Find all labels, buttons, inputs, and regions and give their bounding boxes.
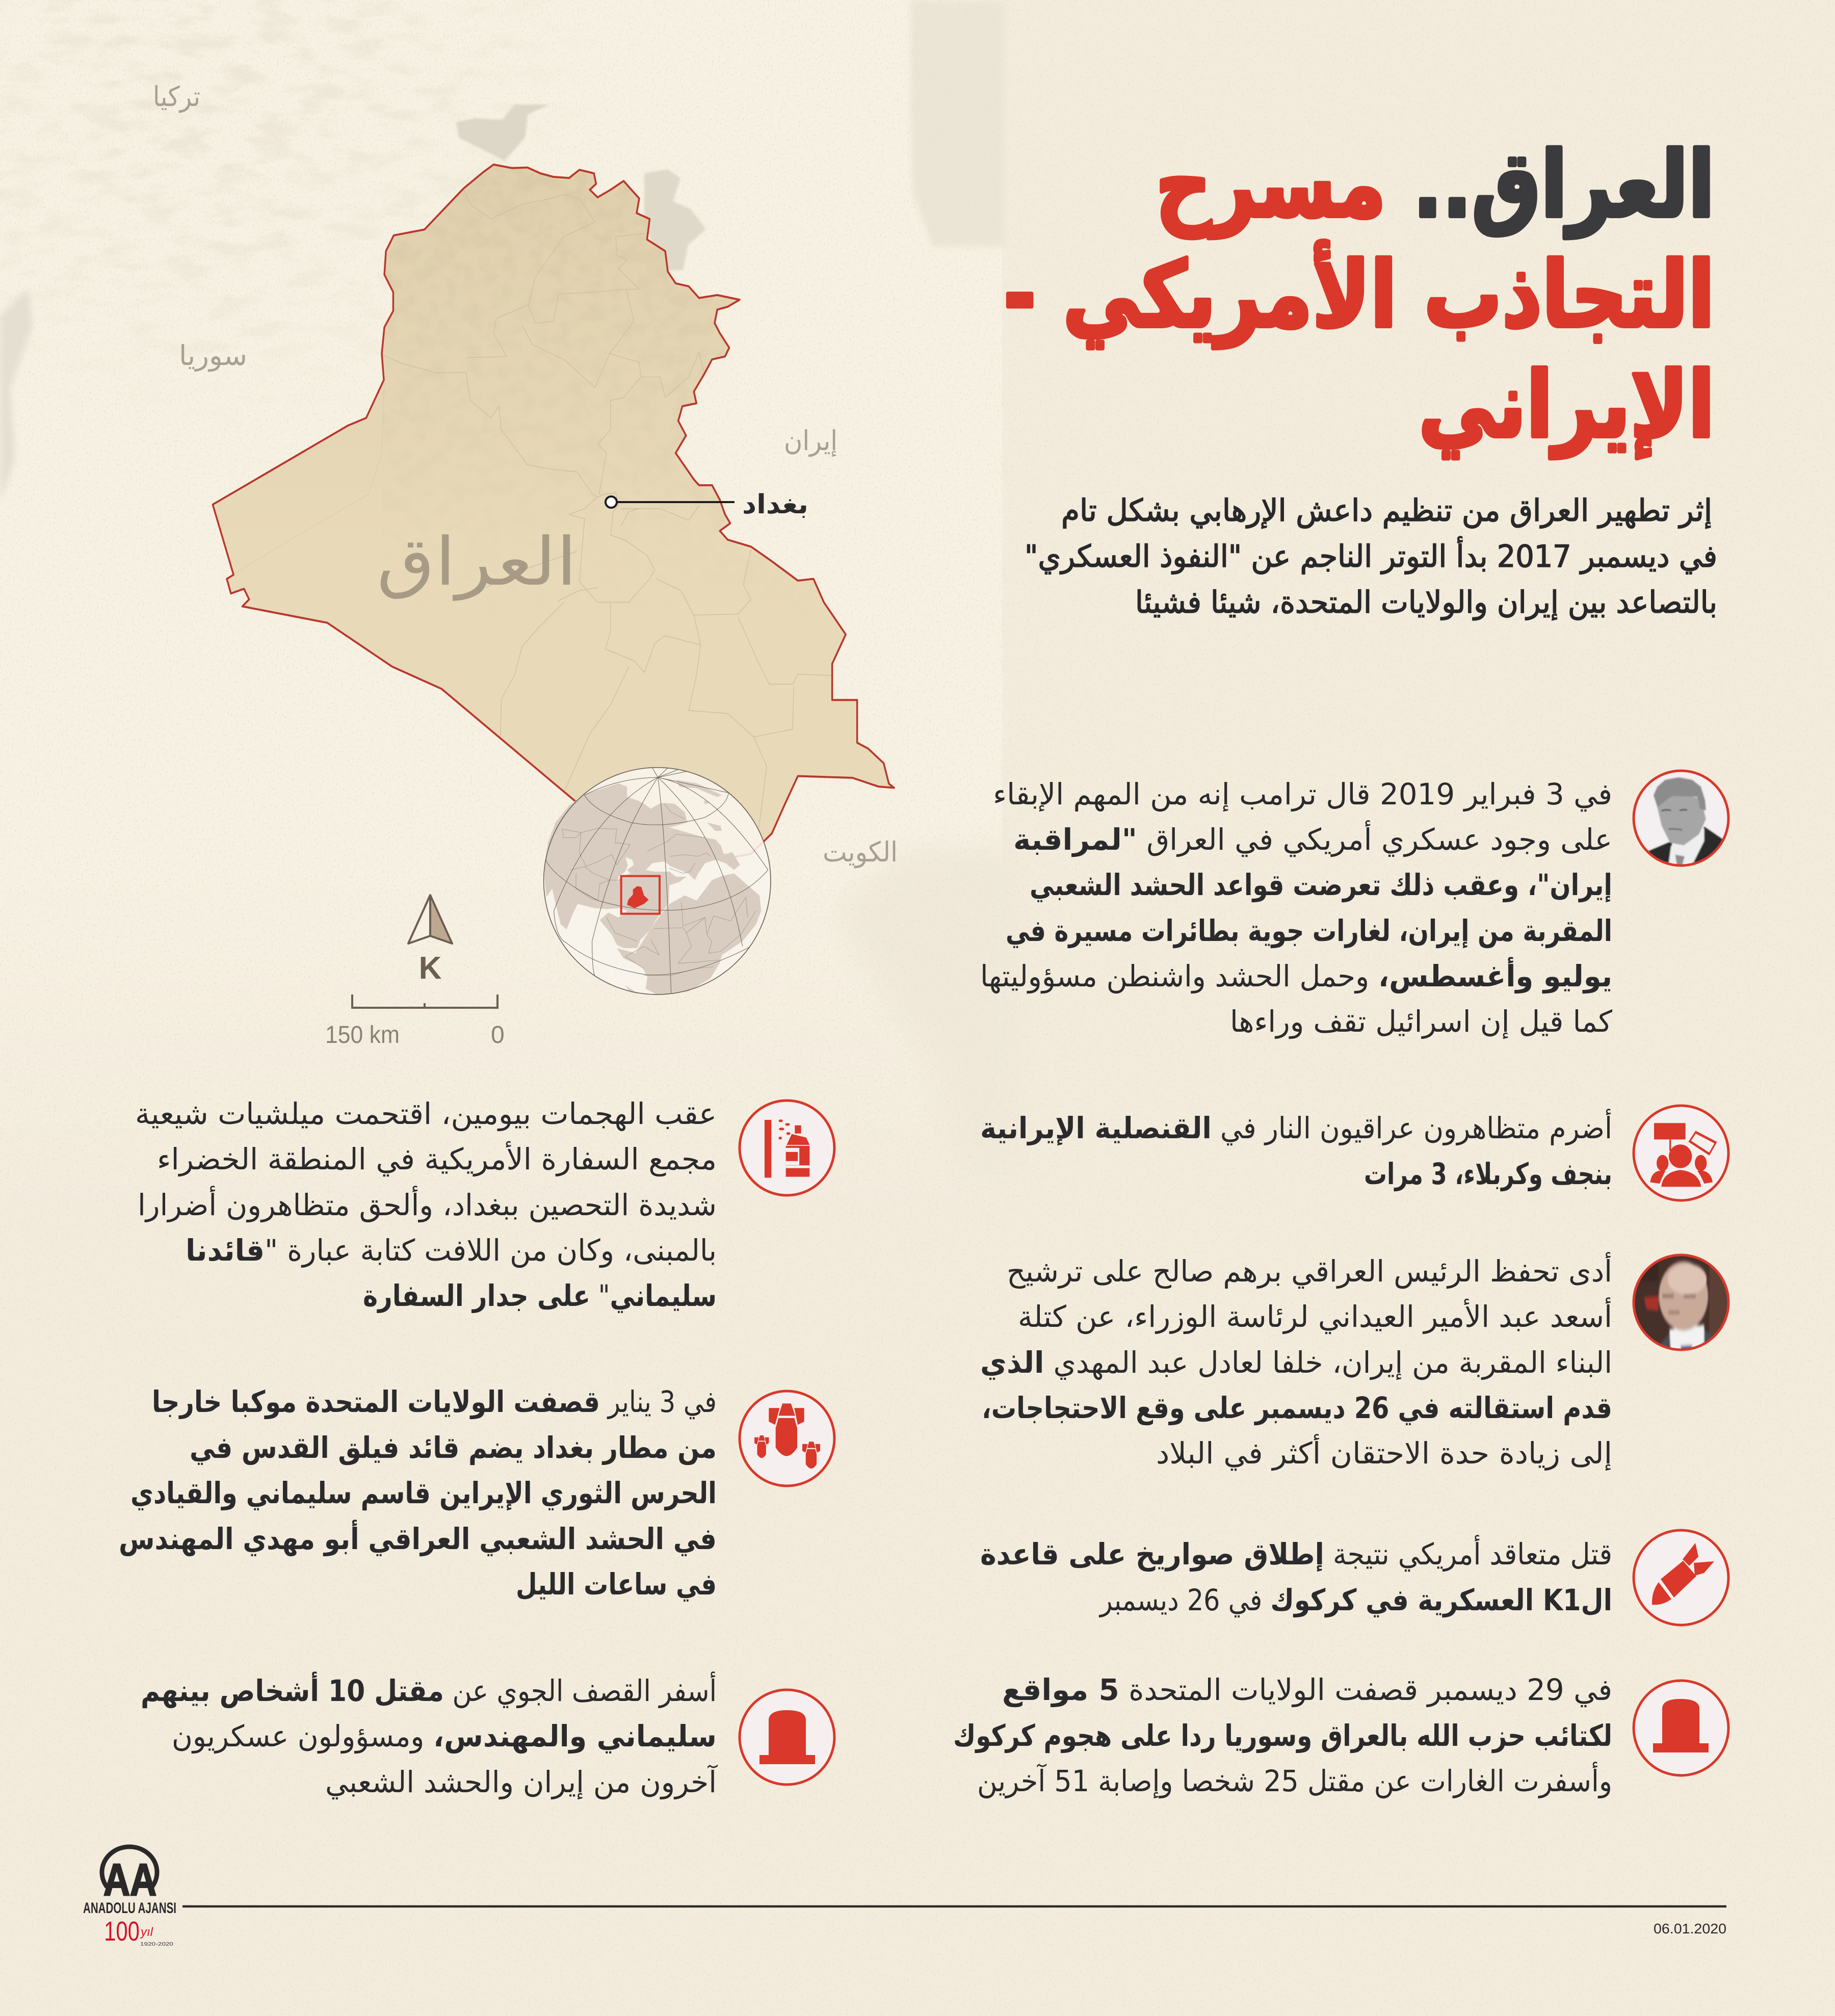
- marker: baghdad: [606, 489, 808, 520]
- text: trump: في 3 فبراير 2019 قال ترامب إنه من المهم الإبقاء: [993, 777, 1612, 812]
- text: barham salih: إلى زيادة حدة الاحتقان أكثر في البلاد: [1156, 1434, 1612, 1471]
- intro paragraph: إثر تطهير العراق من تنظيم داعش الإرهابي بشكل تام: [1061, 493, 1712, 529]
- anadolu agency logo: [83, 1847, 176, 1947]
- scale bar: 150 km: [325, 1022, 400, 1049]
- item: protest: [980, 1106, 1728, 1200]
- text: embassy: شديدة التحصين ببغداد، وألحق متظاهرون أضرارا: [138, 1186, 717, 1223]
- text: casualties: [141, 1671, 718, 1800]
- anadolu agency logo: AA: [103, 1854, 156, 1905]
- portrait: trump: [1634, 771, 1728, 867]
- title: الإيراني: [1419, 352, 1715, 459]
- globe borders: [562, 804, 756, 975]
- text: protest: [980, 1109, 1612, 1192]
- label: syria: سوريا: [179, 339, 247, 372]
- lake urmia: [644, 169, 706, 270]
- anadolu agency logo: ANADOLU AJANSI: [83, 1900, 176, 1917]
- item: barham salih: [980, 1252, 1729, 1471]
- text: trump: يوليو وأغسطس، وحمل الحشد واشنطن مسؤوليتها: [980, 957, 1612, 994]
- text: embassy: عقب الهجمات بيومين، اقتحمت ميلشيات شيعية: [135, 1096, 717, 1132]
- text: convoy strike: في 3 يناير قصفت الولايات المتحدة موكبا خارجا: [152, 1384, 717, 1420]
- item: trump: [980, 771, 1728, 1039]
- text: protest: أضرم متظاهرون عراقيون النار في القنصلية الإيرانية: [980, 1109, 1612, 1146]
- scale bar: 0: [491, 1022, 505, 1049]
- text: trump: على وجود عسكري أمريكي في العراق "لمراقبة: [1013, 820, 1612, 857]
- label: iraq: العراق: [377, 523, 577, 601]
- text: rocket attack: [980, 1535, 1612, 1618]
- footer rule: [182, 1905, 1726, 1907]
- icon: protesters: [1634, 1106, 1728, 1200]
- text: convoy strike: [119, 1384, 717, 1602]
- text: barham salih: أسعد عبد الأمير العيداني لرئاسة الوزراء، عن كتلة: [1018, 1297, 1612, 1334]
- map of iraq: [153, 81, 898, 868]
- text: us strikes: [953, 1672, 1612, 1799]
- date: 06.01.2020: [1654, 1921, 1726, 1936]
- text: convoy strike: في الحشد الشعبي العراقي أبو مهدي المهندس: [119, 1520, 717, 1557]
- iraq on globe: [627, 886, 649, 908]
- icon: alarm: [1634, 1681, 1728, 1775]
- item: casualties: [141, 1671, 834, 1800]
- text: barham salih: أدى تحفظ الرئيس العراقي برهم صالح على ترشيح: [1007, 1252, 1612, 1289]
- globe land masses: [544, 780, 761, 995]
- label: iran: إيران: [784, 425, 837, 457]
- icon: missile: [1634, 1530, 1728, 1625]
- anadolu agency logo: yıl: [140, 1925, 153, 1939]
- text: rocket attack: الK1 العسكرية في كركوك في 26 ديسمبر: [1098, 1583, 1612, 1618]
- text: trump: المقربة من إيران، لغارات جوية بطائرات مسيرة في: [1006, 913, 1612, 949]
- anadolu agency logo: 100: [104, 1916, 140, 1947]
- item: us strikes: [953, 1672, 1728, 1799]
- item: convoy strike: [119, 1384, 834, 1602]
- portrait: barham salih: [1633, 1254, 1729, 1354]
- left column items: [119, 1096, 834, 1800]
- text: barham salih: البناء المقربة من إيران، خلفا لعادل عبد المهدي الذي: [980, 1345, 1612, 1380]
- text: casualties: سليماني والمهندس، ومسؤولون عسكريون: [172, 1719, 717, 1754]
- iraq territory: [213, 161, 894, 857]
- text: casualties: آخرون من إيران والحشد الشعبي: [325, 1764, 718, 1800]
- globe grid: [545, 768, 768, 994]
- intro paragraph: في ديسمبر 2017 بدأ التوتر الناجم عن "النفوذ العسكري": [1025, 536, 1717, 574]
- label: turkey: تركيا: [153, 81, 200, 113]
- item: embassy: [135, 1096, 834, 1313]
- text: us strikes: لكتائب حزب الله بالعراق وسوريا ردا على هجوم كركوك: [953, 1718, 1612, 1753]
- north arrow: [408, 895, 452, 986]
- text: protest: بنجف وكربلاء، 3 مرات: [1364, 1157, 1612, 1192]
- text: convoy strike: من مطار بغداد يضم قائد فيلق القدس في: [190, 1430, 717, 1465]
- text: trump: [980, 777, 1612, 1039]
- north arrow: K: [419, 951, 442, 986]
- text: trump: إيران"، وعقب ذلك تعرضت قواعد الحشد الشعبي: [1030, 868, 1612, 903]
- icon: spray paint: [740, 1101, 834, 1195]
- icon: alarm: [740, 1690, 834, 1785]
- title: العراق.. مسرح: [1156, 132, 1715, 239]
- intro paragraph: [1025, 493, 1717, 620]
- text: us strikes: وأسفرت الغارات عن مقتل 25 شخصا وإصابة 51 آخرين: [977, 1762, 1612, 1799]
- title: التجاذب الأمريكي -: [1004, 241, 1715, 349]
- text: rocket attack: قتل متعاقد أمريكي نتيجة إطلاق صواريخ على قاعدة: [980, 1535, 1612, 1572]
- anadolu agency logo: 1920-2020: [140, 1942, 174, 1947]
- footer: [83, 1847, 1726, 1947]
- text: convoy strike: الحرس الثوري الإيراين قاسم سليماني والقيادي: [130, 1476, 717, 1511]
- icon: bombs: [740, 1391, 834, 1486]
- item: rocket attack: [980, 1530, 1728, 1625]
- text: barham salih: [980, 1252, 1612, 1471]
- text: convoy strike: في ساعات الليل: [516, 1567, 717, 1602]
- title: [1004, 132, 1715, 459]
- text: casualties: أسفر القصف الجوي عن مقتل 10 أشخاص بينهم: [141, 1671, 717, 1709]
- text: embassy: بالمبنى، وكان من اللافت كتابة عبارة "قائدنا: [186, 1233, 717, 1268]
- right column items: [953, 771, 1729, 1799]
- text: trump: كما قيل إن اسرائيل تقف وراءها: [1230, 1004, 1612, 1039]
- marker: baghdad: بغداد: [742, 489, 808, 520]
- lake van: [456, 104, 549, 161]
- intro paragraph: بالتصاعد بين إيران والولايات المتحدة، شيئا فشيئا: [1135, 585, 1717, 620]
- scale bar: [325, 994, 505, 1049]
- label: kuwait: الكويت: [823, 836, 898, 868]
- text: embassy: سليماني" على جدار السفارة: [363, 1278, 717, 1313]
- text: barham salih: قدم استقالته في 26 ديسمبر على وقع الاحتجاجات،: [982, 1391, 1612, 1426]
- locator frame: [621, 876, 660, 914]
- text: embassy: مجمع السفارة الأمريكية في المنطقة الخضراء: [157, 1141, 717, 1177]
- text: us strikes: في 29 ديسمبر قصفت الولايات المتحدة 5 مواقع: [1002, 1672, 1612, 1708]
- text: embassy: [135, 1096, 717, 1313]
- locator globe: [544, 768, 771, 995]
